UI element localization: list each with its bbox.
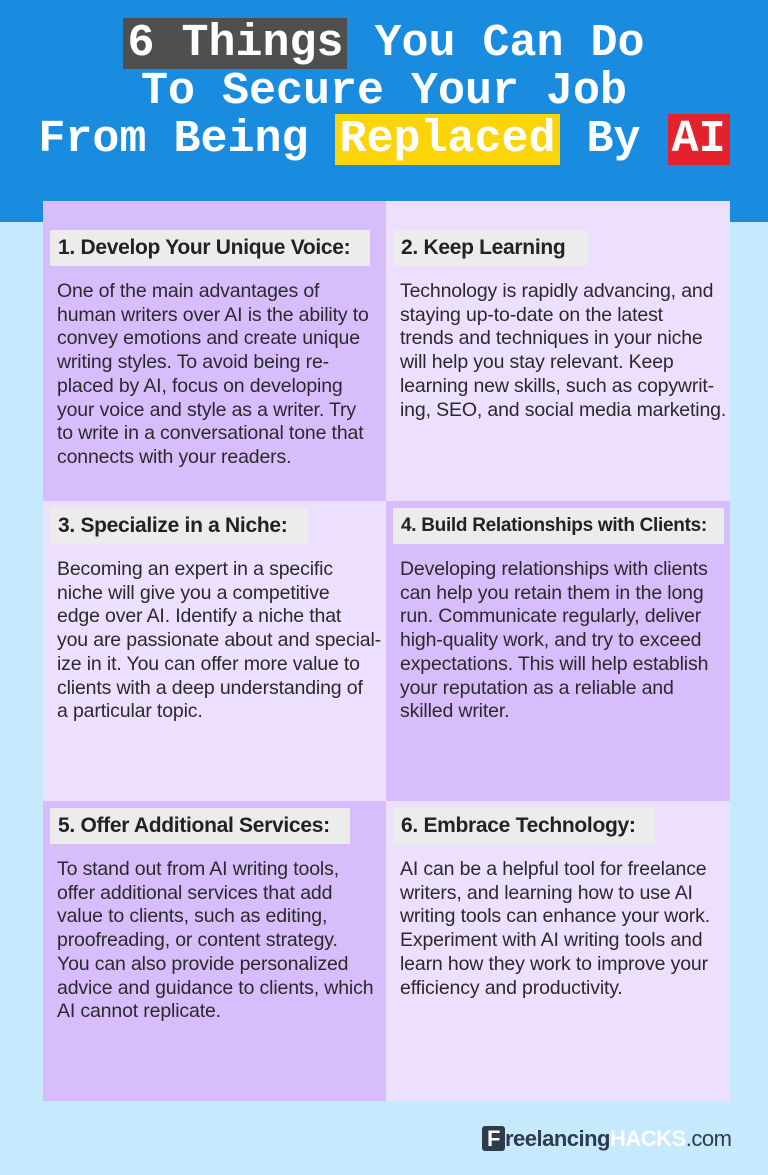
- text 4: high-quality work, and try to exceed: [400, 629, 701, 651]
- heading 5: [50, 808, 350, 844]
- heading 2: 2. Keep Learning: [401, 236, 565, 259]
- text 6: efficiency and productivity.: [400, 977, 623, 999]
- text 1: writing styles. To avoid being re-: [57, 351, 329, 373]
- heading 1: [50, 230, 370, 266]
- text 4: your reputation as a reliable and: [400, 677, 674, 699]
- text 1: placed by AI, focus on developing: [57, 375, 343, 397]
- heading 3: [50, 508, 308, 544]
- heading 1: 1. Develop Your Unique Voice:: [58, 236, 350, 259]
- heading 3: 3. Specialize in a Niche:: [58, 514, 287, 537]
- panel: 5: [43, 801, 386, 1101]
- text 5: advice and guidance to clients, which: [57, 977, 373, 999]
- text 2: will help you stay relevant. Keep: [400, 351, 674, 373]
- text 6: [400, 858, 710, 999]
- heading 2: [393, 230, 588, 266]
- text 3: edge over AI. Identify a niche that: [57, 605, 341, 627]
- text 3: clients with a deep understanding of: [57, 677, 363, 699]
- text 5: offer additional services that add: [57, 882, 332, 904]
- panel: 4: [386, 501, 730, 801]
- panel: 2: [386, 201, 730, 501]
- heading 6: 6. Embrace Technology:: [401, 814, 636, 837]
- text 5: AI cannot replicate.: [57, 1000, 221, 1022]
- text 1: to write in a conversational tone that: [57, 422, 363, 444]
- title: From Being Replaced By AI: [38, 114, 726, 165]
- text 4: run. Communicate regularly, deliver: [400, 605, 701, 627]
- text 6: writers, and learning how to use AI: [400, 882, 693, 904]
- text 1: [57, 280, 369, 468]
- text 1: One of the main advantages of: [57, 280, 319, 302]
- heading 4: [393, 508, 724, 544]
- text 1: connects with your readers.: [57, 446, 291, 468]
- text 4: [400, 558, 708, 722]
- text 2: Technology is rapidly advancing, and: [400, 280, 713, 302]
- title: [38, 18, 730, 165]
- text 6: learn how they work to improve your: [400, 953, 708, 975]
- text 5: [57, 858, 373, 1022]
- text 2: ing, SEO, and social media marketing.: [400, 399, 726, 421]
- text 3: a particular topic.: [57, 700, 203, 722]
- text 1: your voice and style as a writer. Try: [57, 399, 356, 421]
- text 1: convey emotions and create unique: [57, 327, 360, 349]
- text 4: can help you retain them in the long: [400, 582, 704, 604]
- header band: [0, 0, 768, 222]
- text 2: trends and techniques in your niche: [400, 327, 703, 349]
- text 5: value to clients, such as editing,: [57, 905, 327, 927]
- text 3: ize in it. You can offer more value to: [57, 653, 360, 675]
- text 2: staying up-to-date on the latest: [400, 304, 663, 326]
- text 1: human writers over AI is the ability to: [57, 304, 369, 326]
- heading 6: [393, 808, 655, 844]
- text 3: Becoming an expert in a specific: [57, 558, 333, 580]
- logo: FreelancingHACKS.com: [487, 1126, 731, 1151]
- text 6: AI can be a helpful tool for freelance: [400, 858, 707, 880]
- text 6: Experiment with AI writing tools and: [400, 929, 702, 951]
- panel: 1: [43, 201, 386, 501]
- text 3: [57, 558, 381, 722]
- panel: 6: [386, 801, 730, 1101]
- text 3: you are passionate about and special-: [57, 629, 381, 651]
- heading 4: 4. Build Relationships with Clients:: [401, 515, 707, 536]
- text 5: proofreading, or content strategy.: [57, 929, 338, 951]
- text 6: writing tools can enhance your work.: [400, 905, 710, 927]
- text 3: niche will give you a competitive: [57, 582, 330, 604]
- text 5: To stand out from AI writing tools,: [57, 858, 339, 880]
- title: To Secure Your Job: [141, 66, 627, 117]
- text 2: learning new skills, such as copywrit-: [400, 375, 714, 397]
- heading 5: 5. Offer Additional Services:: [58, 814, 330, 837]
- title: 6 Things You Can Do: [127, 18, 645, 69]
- panel: 3: [43, 501, 386, 801]
- text 5: You can also provide personalized: [57, 953, 348, 975]
- text 4: Developing relationships with clients: [400, 558, 708, 580]
- text 4: expectations. This will help establish: [400, 653, 708, 675]
- text 4: skilled writer.: [400, 700, 509, 722]
- text 2: [400, 280, 726, 421]
